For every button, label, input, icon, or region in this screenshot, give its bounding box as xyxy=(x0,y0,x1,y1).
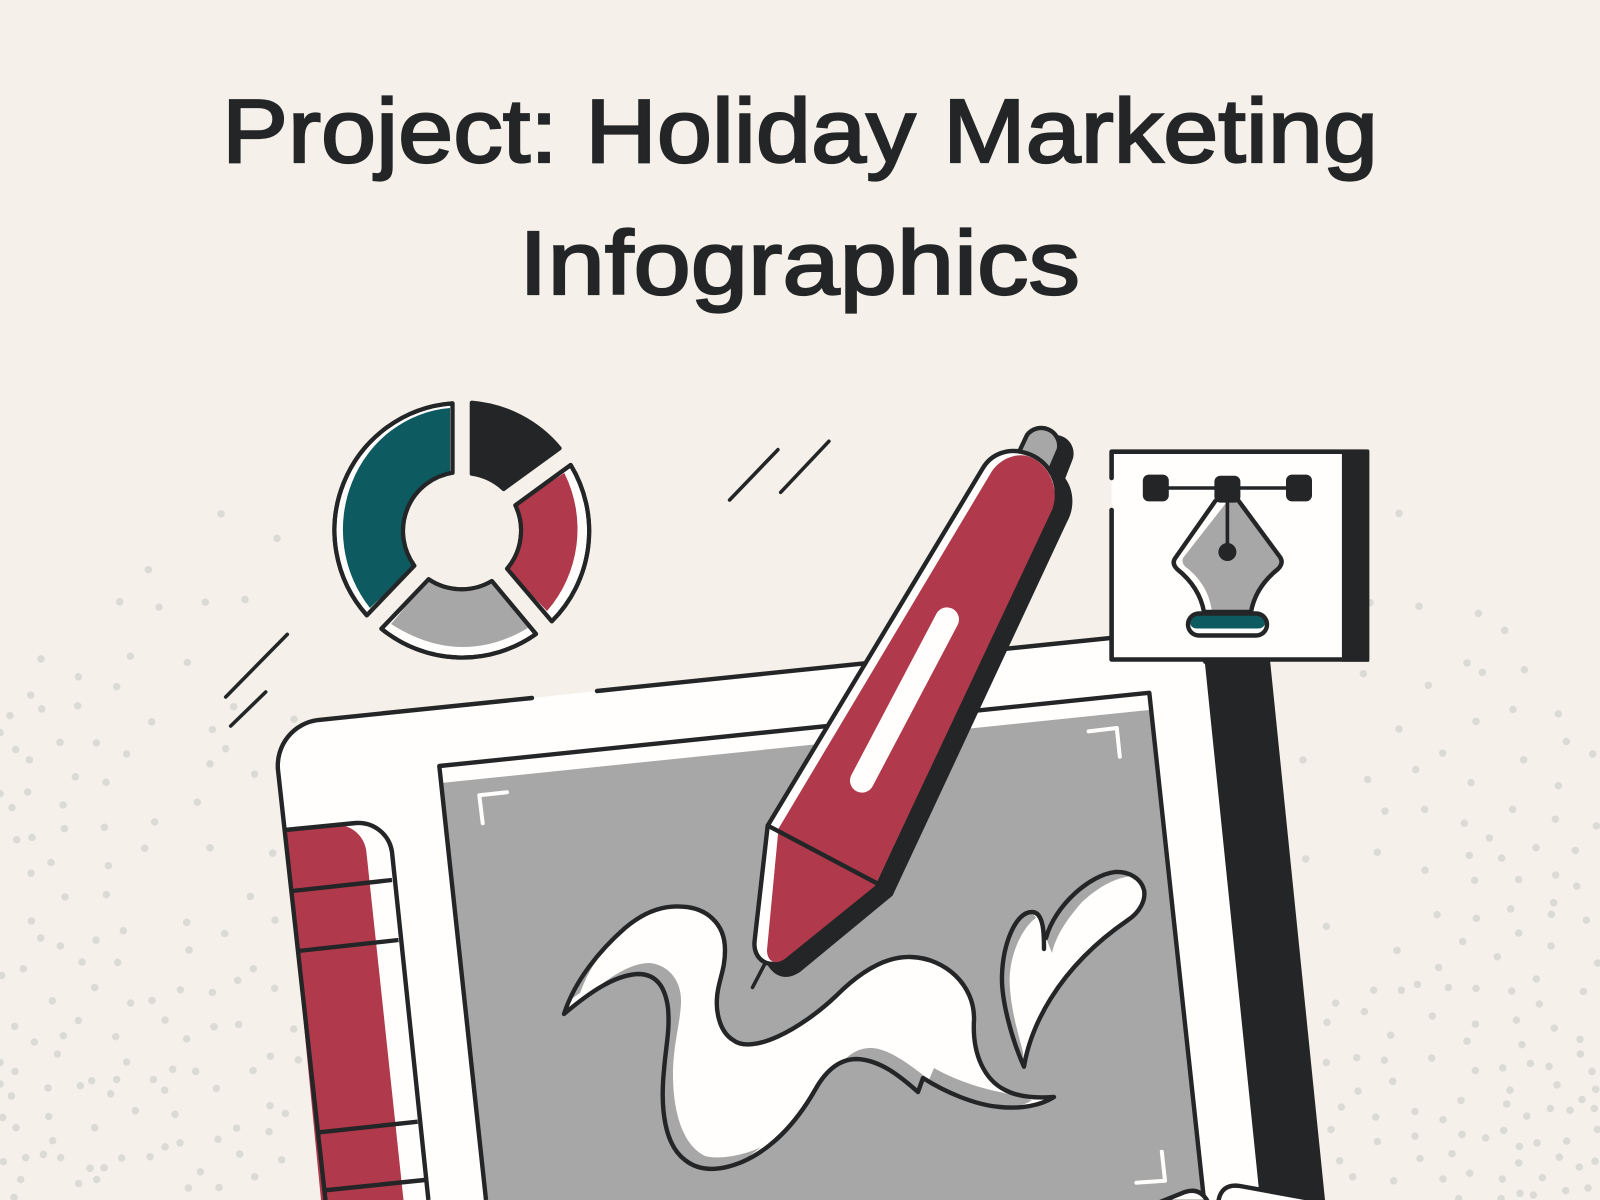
screen corner mark: bottom right xyxy=(1136,1152,1165,1183)
pen cap xyxy=(1019,428,1074,479)
donut segment: grey xyxy=(381,579,536,658)
title: Infographics xyxy=(519,214,1080,314)
stylus pen xyxy=(752,428,1074,987)
screen corner mark: top right xyxy=(1089,728,1120,757)
drawing tablet xyxy=(278,634,1325,1200)
pen tail line xyxy=(752,963,766,987)
heart doodle xyxy=(1002,871,1144,1067)
tablet left side panel xyxy=(285,823,428,1200)
tablet screen xyxy=(439,693,1204,1200)
icon: nib base pill xyxy=(1188,614,1267,636)
pen tool icon card xyxy=(1112,450,1369,662)
title: Project: Holiday Marketing xyxy=(222,82,1378,182)
donut segment: teal xyxy=(334,403,452,615)
pen body xyxy=(754,451,1057,964)
donut chart xyxy=(334,403,589,658)
tablet dark side xyxy=(1203,660,1325,1200)
motion strokes near donut, right xyxy=(730,441,829,500)
icon: vector pen nib xyxy=(1174,500,1282,612)
donut segment: black xyxy=(472,403,560,489)
pen highlight xyxy=(862,619,947,781)
tablet bottom buttons xyxy=(1160,1186,1322,1200)
background speckle dots, right xyxy=(1303,513,1598,1199)
motion strokes near donut, left xyxy=(226,634,287,726)
background speckle dots, left xyxy=(0,514,298,1197)
tablet outline xyxy=(278,637,1120,1200)
squiggle brush stroke drawing xyxy=(564,906,1054,1169)
icon: bezier handle bar xyxy=(1143,475,1312,503)
pen shadow xyxy=(765,462,1072,977)
tablet white body xyxy=(278,634,1260,1200)
title xyxy=(222,82,1378,314)
screen corner mark: top left xyxy=(479,792,507,823)
donut segment: red xyxy=(507,465,589,621)
